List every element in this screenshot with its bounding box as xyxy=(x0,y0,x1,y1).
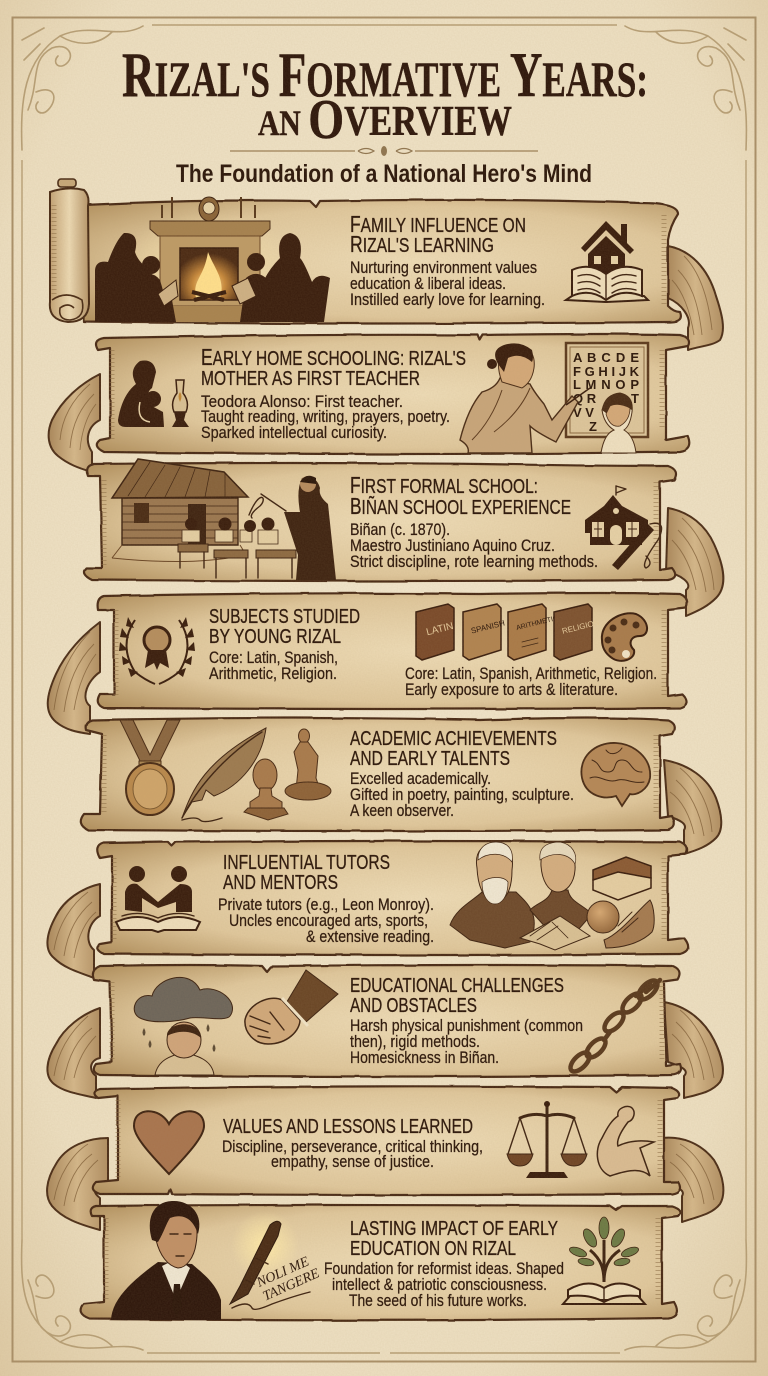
icon: handshake over open book xyxy=(116,866,200,932)
icon: storm cloud and crying boy xyxy=(134,977,233,1075)
body text: Uncles encouraged arts, sports, xyxy=(229,912,428,930)
body text: Sparked intellectual curiosity. xyxy=(201,424,387,442)
body text: Excelled academically. xyxy=(350,770,491,788)
ribbon connector 1 to 2 xyxy=(668,246,723,350)
illustration: teacher pointing at alphabet chart: A B C D E xyxy=(573,350,639,365)
heading: AND EARLY TALENTS xyxy=(350,747,510,770)
heading: FIRST FORMAL SCHOOL: xyxy=(350,472,538,498)
title: VERVIEW xyxy=(344,99,512,145)
handwritten book title: TANGERE xyxy=(261,1266,322,1304)
icon: laurel wreath with rosette xyxy=(119,617,195,684)
heading: ACADEMIC ACHIEVEMENTS xyxy=(350,727,557,750)
body text xyxy=(350,259,545,309)
body text xyxy=(218,896,434,946)
icon: tree growing from book xyxy=(563,1217,645,1304)
icon: clay bust and statue xyxy=(244,729,331,820)
ribbon connector 3 to 4 xyxy=(666,508,723,616)
body text xyxy=(324,1260,564,1310)
title: AN xyxy=(258,103,308,143)
body text xyxy=(350,1017,583,1067)
icon: broken chain xyxy=(567,977,661,1075)
illustration: two mentor portraits xyxy=(450,842,592,948)
icon: mother with child and oil lamp xyxy=(118,360,189,427)
body text left xyxy=(209,649,338,683)
heading: BIÑAN SCHOOL EXPERIENCE xyxy=(350,493,571,519)
heading xyxy=(201,344,466,390)
body text xyxy=(201,393,450,442)
body text: Discipline, perseverance, critical thinking, xyxy=(222,1138,483,1156)
body text: A keen observer. xyxy=(350,802,454,820)
panel 5: achievements xyxy=(81,718,674,831)
body text: Strict discipline, rote learning methods. xyxy=(350,553,598,571)
body text: Gifted in poetry, painting, sculpture. xyxy=(350,786,574,804)
body text left: Core: Latin, Spanish, xyxy=(209,649,338,667)
heading: AND MENTORS xyxy=(223,871,338,894)
body text left: Arithmetic, Religion. xyxy=(209,665,337,683)
body text: Private tutors (e.g., Leon Monroy). xyxy=(218,896,434,914)
illustration: wooden schoolhouse, teacher and pupils xyxy=(112,459,336,580)
heading xyxy=(350,211,526,257)
heading: AND OBSTACLES xyxy=(350,994,477,1017)
panel 4: subjects studied xyxy=(98,593,687,709)
icon: flexed arm xyxy=(597,1106,654,1176)
icon row: four books and palette: ARITHMETIC xyxy=(516,615,559,632)
body text: Harsh physical punishment (common xyxy=(350,1017,583,1035)
panel 8: values xyxy=(93,1086,680,1195)
subtitle: The Foundation of a National Hero's Mind xyxy=(176,160,592,188)
body text: & extensive reading. xyxy=(306,928,434,946)
heading xyxy=(350,974,564,1017)
icon: stacked books, open book, ball and boot xyxy=(520,857,654,950)
heading xyxy=(350,472,571,519)
icon row: four books and palette: RELIGION xyxy=(561,618,601,636)
ribbon connector 8 to 9 left xyxy=(47,1138,108,1230)
heading: FAMILY INFLUENCE ON xyxy=(350,211,526,237)
body text: Maestro Justiniano Aquino Cruz. xyxy=(350,537,555,555)
heading left: SUBJECTS STUDIED xyxy=(209,605,360,628)
heading: EDUCATION ON RIZAL xyxy=(350,1237,516,1260)
panel 9: lasting impact xyxy=(81,1201,680,1320)
heading xyxy=(223,851,390,894)
heading: VALUES AND LESSONS LEARNED xyxy=(223,1115,473,1138)
illustration: teacher pointing at alphabet chart xyxy=(460,343,648,453)
title: RIZAL'S FORMATIVE YEARS: xyxy=(122,39,648,110)
body text xyxy=(350,770,574,820)
heading: EARLY HOME SCHOOLING: RIZAL'S xyxy=(201,344,466,370)
heading: RIZAL'S LEARNING xyxy=(350,231,494,257)
body text right: Core: Latin, Spanish, Arithmetic, Religion. xyxy=(405,665,657,683)
ribbon connector 6 to 7 xyxy=(47,884,100,978)
heading left xyxy=(209,605,360,648)
fireplace family scene xyxy=(95,197,330,328)
illustration: teacher pointing at alphabet chart: Q R xyxy=(573,391,597,406)
heading: INFLUENTIAL TUTORS xyxy=(223,851,390,874)
heading left: BY YOUNG RIZAL xyxy=(209,625,341,648)
ribbon connector 2 to 3 xyxy=(49,374,100,472)
icon: brain xyxy=(581,743,650,806)
icon: house over open book xyxy=(566,221,648,302)
title: O xyxy=(308,89,344,151)
ribbon connector 7 to 8 left xyxy=(47,1008,100,1098)
body text: The seed of his future works. xyxy=(349,1292,527,1310)
icon: quill pen xyxy=(182,728,266,822)
heading xyxy=(350,727,557,770)
body text: Instilled early love for learning. xyxy=(350,291,545,309)
icon row: four books and palette xyxy=(416,604,647,661)
body text xyxy=(222,1138,483,1171)
body text: Taught reading, writing, prayers, poetry. xyxy=(201,408,450,426)
handwritten book title: NOLI ME xyxy=(254,1254,312,1291)
illustration: teacher pointing at alphabet chart: Z xyxy=(589,419,597,434)
heading xyxy=(350,1217,558,1260)
body text: Biñan (c. 1870). xyxy=(350,521,450,539)
body text: empathy, sense of justice. xyxy=(271,1153,434,1171)
body text: intellect & patriotic consciousness. xyxy=(332,1276,547,1294)
body text right xyxy=(405,665,657,699)
body text xyxy=(350,521,598,571)
ribbon connector 5 to 6 xyxy=(664,760,721,854)
icon: clenched fist with sleeve xyxy=(245,970,338,1044)
handwritten book title xyxy=(254,1252,322,1305)
icon row: four books and palette: SPANISH xyxy=(470,618,506,636)
icon: school building and cane xyxy=(585,486,662,570)
ribbon connector 8 to 9 right xyxy=(662,1138,723,1222)
panel 6: tutors and mentors xyxy=(97,841,688,955)
icon: glowing pen xyxy=(230,1211,299,1304)
panel 1: family influence xyxy=(50,179,681,328)
body text: Teodora Alonso: First teacher. xyxy=(201,393,403,411)
title divider ornament xyxy=(230,146,538,156)
body text: education & liberal ideas. xyxy=(350,275,506,293)
portrait of Rizal xyxy=(111,1201,221,1320)
icon: heart xyxy=(134,1111,204,1174)
icon: medal on ribbon xyxy=(120,720,180,815)
icon: scales of justice xyxy=(507,1101,587,1178)
heading: EDUCATIONAL CHALLENGES xyxy=(350,974,564,997)
body text right: Early exposure to arts & literature. xyxy=(405,681,618,699)
body text: then), rigid methods. xyxy=(350,1033,480,1051)
body text: Foundation for reformist ideas. Shaped xyxy=(324,1260,564,1278)
rolled scroll end xyxy=(50,179,89,322)
heading: LASTING IMPACT OF EARLY xyxy=(350,1217,558,1240)
heading: MOTHER AS FIRST TEACHER xyxy=(201,367,420,390)
panel 3: first formal school xyxy=(84,459,676,581)
ribbon connector 7 to 8 right xyxy=(664,1002,723,1098)
illustration: teacher pointing at alphabet chart: F G H I J K xyxy=(573,364,640,379)
icon row: four books and palette: LATIN xyxy=(425,621,455,638)
panel 2: home schooling xyxy=(96,334,690,454)
pen flourish xyxy=(232,1292,310,1309)
body text: Nurturing environment values xyxy=(350,259,537,277)
panel 7: challenges xyxy=(93,965,681,1076)
illustration: teacher pointing at alphabet chart: V V xyxy=(573,405,594,420)
scroll body xyxy=(84,200,681,324)
illustration: teacher pointing at alphabet chart: L M N O P xyxy=(573,377,639,392)
title xyxy=(122,39,648,151)
illustration: teacher pointing at alphabet chart: T xyxy=(631,391,639,406)
ribbon connector 4 to 5 xyxy=(48,622,100,734)
body text: Homesickness in Biñan. xyxy=(350,1049,499,1067)
